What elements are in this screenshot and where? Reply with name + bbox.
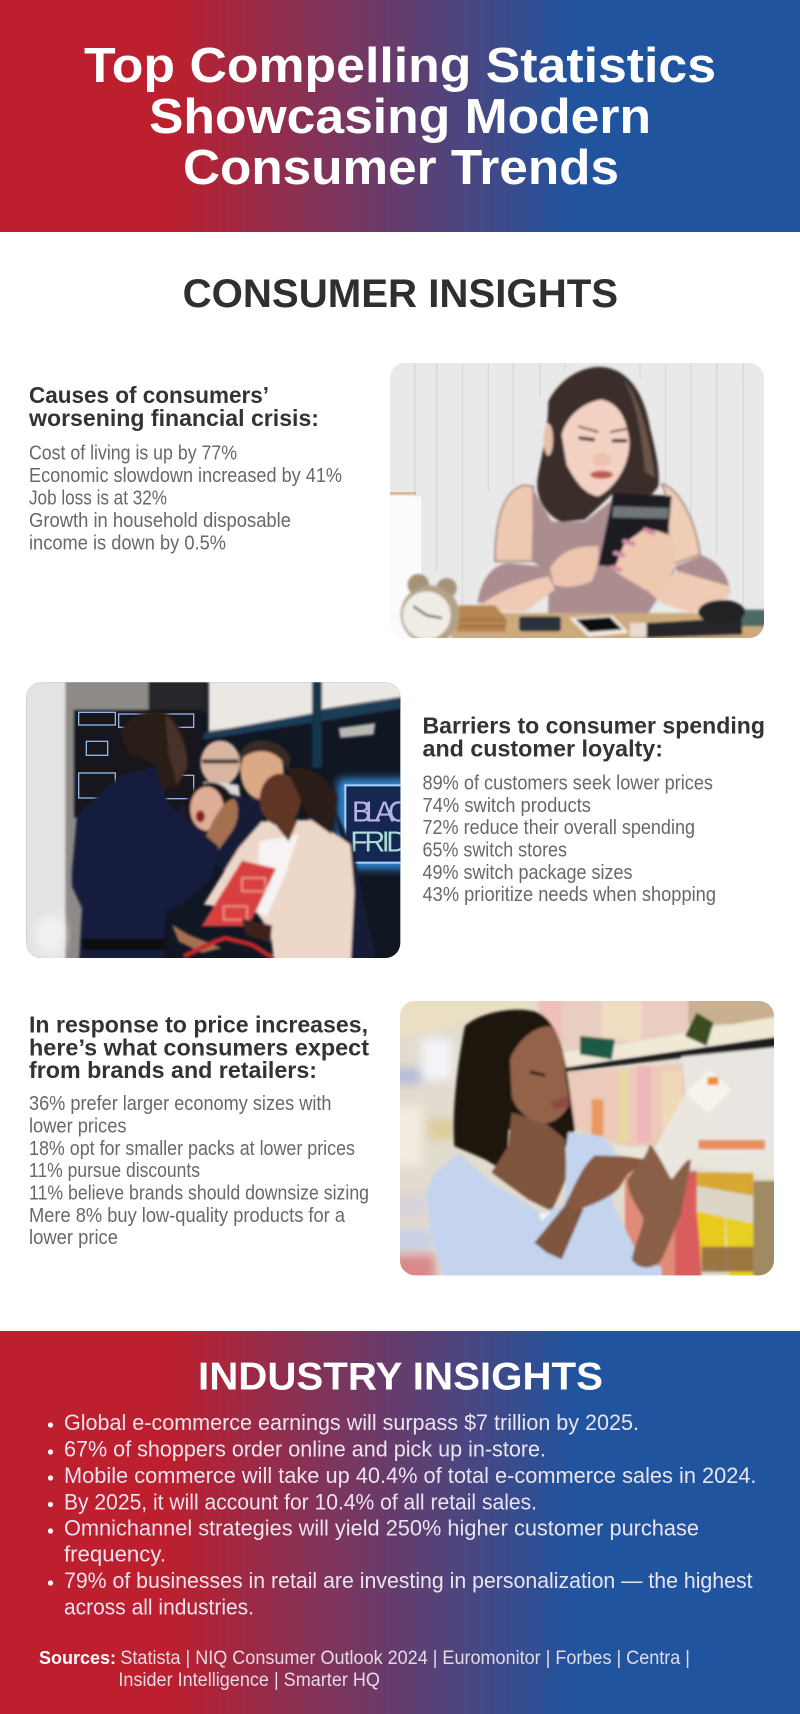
barriers list: 65% switch stores [422, 838, 567, 862]
sources: Statista | NIQ Consumer Outlook 2024 | Euromonitor | Forbes | Centra | [120, 1648, 690, 1669]
man [120, 711, 188, 790]
causes heading [28, 382, 319, 431]
response heading [29, 1012, 369, 1083]
barriers heading: Barriers to consumer spending [422, 713, 765, 739]
hands [242, 919, 272, 943]
barriers list: 89% of customers seek lower prices [422, 772, 713, 795]
causes list [29, 442, 342, 554]
forearms and hands [534, 1199, 583, 1259]
bullet: order online: 67% of shoppers order online and pick up in-store. [64, 1437, 546, 1462]
barriers list: 49% switch package sizes [422, 861, 632, 884]
panel: barriers to spending [26, 682, 764, 958]
bullet: retail sales: By 2025, it will account for 10.4% of all retail sales. [64, 1489, 537, 1514]
causes list: Economic slowdown increased by 41% [29, 464, 342, 487]
bullet: omnichannel [48, 1516, 699, 1567]
sources [39, 1648, 690, 1691]
photo: woman with calculator [390, 363, 768, 644]
hand on calculator [612, 529, 675, 595]
panel: causes of financial crisis [28, 363, 768, 644]
chest [492, 1113, 567, 1211]
causes list: Job loss is at 32% [29, 486, 167, 509]
table [452, 613, 768, 641]
bullet: personalization [48, 1568, 752, 1619]
back people [200, 740, 240, 786]
barriers heading [422, 713, 765, 761]
body [495, 485, 533, 561]
bullet: personalization: across all industries. [64, 1594, 254, 1619]
calculator small [519, 616, 561, 631]
title: Showcasing Modern [149, 90, 651, 144]
wallet [630, 623, 653, 637]
header banner [0, 0, 800, 232]
title: Consumer Trends [183, 141, 619, 195]
barriers list: 72% reduce their overall spending [422, 816, 695, 839]
response list: 11% believe brands should downsize sizing [29, 1182, 369, 1204]
blurred aisle [400, 1001, 531, 1276]
bullet: omnichannel: Omnichannel strategies will yield 250% higher customer purchase [64, 1516, 699, 1541]
bullet: e-commerce earnings: Global e-commerce earnings will surpass $7 trillion by 2025. [64, 1410, 639, 1435]
sweater [426, 1132, 662, 1283]
flyer [201, 861, 276, 926]
industry bullet list [48, 1410, 756, 1619]
hair [537, 367, 659, 522]
response list: Mere 8% buy low-quality products for a [29, 1204, 346, 1227]
calculator [598, 493, 672, 567]
big neon sign [344, 785, 409, 863]
footer panel: industry insights [0, 1331, 800, 1714]
barriers list [422, 772, 716, 906]
carton [655, 1094, 691, 1180]
title [84, 39, 716, 195]
sources: Sources: [39, 1648, 116, 1668]
clock [408, 574, 429, 595]
bullet: personalization: 79% of businesses in retail are investing in personalization — the highest [64, 1568, 752, 1593]
sources: Insider Intelligence | Smarter HQ [118, 1670, 380, 1691]
response heading: from brands and retailers: [29, 1057, 317, 1083]
bullet: omnichannel: frequency. [64, 1542, 166, 1567]
barriers list: 43% prioritize needs when shopping [422, 883, 716, 906]
response list: lower prices [29, 1115, 126, 1138]
big neon sign: BLAC [352, 796, 409, 828]
causes list: income is down by 0.5% [29, 531, 226, 554]
response list: lower price [29, 1226, 118, 1249]
hair [454, 1010, 575, 1173]
response list: 36% prefer larger economy sizes with [29, 1092, 332, 1115]
response list: 11% pursue discounts [29, 1159, 200, 1182]
photo: black friday shoppers [26, 682, 400, 958]
title: Top Compelling Statistics [84, 39, 716, 93]
causes heading: worsening financial crisis: [28, 405, 319, 431]
response list: 18% opt for smaller packs at lower prices [29, 1137, 355, 1160]
barriers heading: and customer loyalty: [422, 735, 663, 761]
causes list: Cost of living is up by 77% [29, 442, 237, 465]
causes list: Growth in household disposable [29, 509, 291, 532]
bullet: mobile commerce: Mobile commerce will take up 40.4% of total e-commerce sales in 2024. [64, 1463, 756, 1488]
woman in blazer [204, 820, 354, 971]
big neon sign: FRID [350, 826, 407, 858]
response list [29, 1092, 369, 1249]
panel: response to price increases [29, 1001, 774, 1276]
barriers list: 74% switch products [422, 794, 591, 817]
photo: woman reading product label [400, 1001, 774, 1276]
phone [569, 615, 629, 637]
response heading: In response to price increases, [29, 1012, 368, 1038]
navy behind woman [332, 805, 375, 971]
industry heading: INDUSTRY INSIGHTS [198, 1356, 603, 1398]
causes heading: Causes of consumers’ [29, 382, 269, 408]
face [562, 400, 629, 496]
face [510, 1026, 570, 1123]
heading: consumer insights: CONSUMER INSIGHTS [183, 272, 618, 316]
response heading: here’s what consumers expect [29, 1035, 369, 1061]
